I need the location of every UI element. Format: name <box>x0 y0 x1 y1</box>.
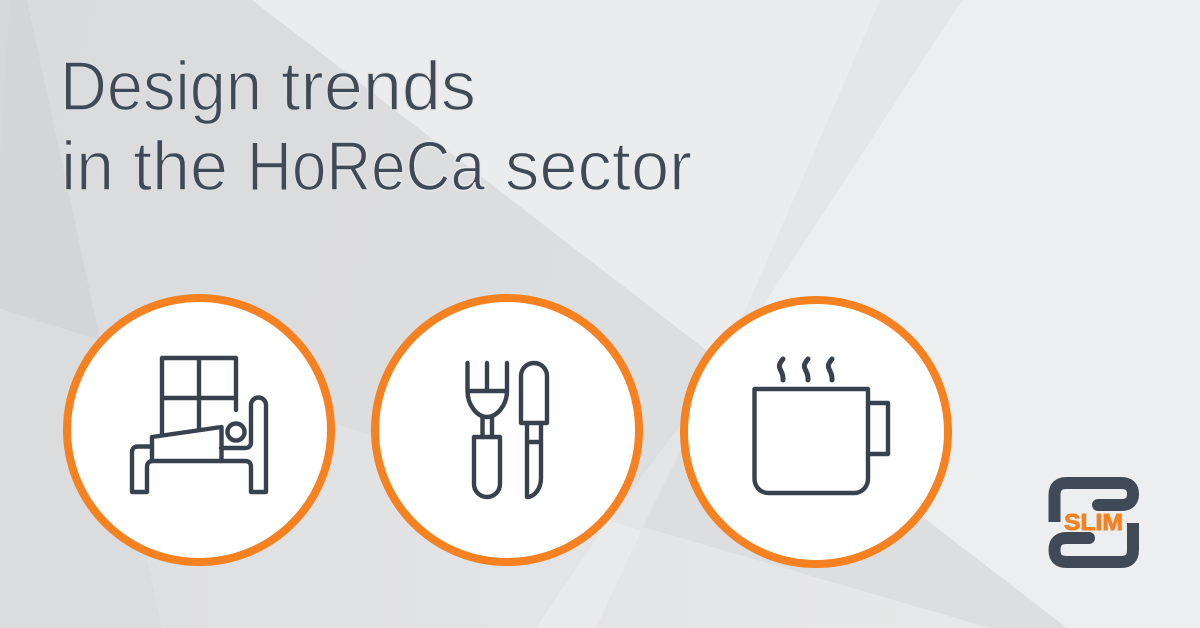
logo: SLIM: SLIM <box>1064 509 1123 535</box>
title: in the <box>61 127 228 205</box>
title: HoReCa <box>247 127 485 205</box>
title <box>60 47 692 205</box>
title: sector <box>505 127 692 205</box>
title: trends <box>281 47 476 125</box>
title: Design <box>60 47 262 125</box>
icon: fork and knife <box>468 363 547 497</box>
icon circle: hotel bed <box>67 298 331 562</box>
icon: bed by a window <box>132 358 266 492</box>
icon: steaming mug <box>754 359 888 493</box>
logo: SLIM <box>1054 483 1133 562</box>
icon circle: restaurant <box>375 298 639 562</box>
icon circle: cafe <box>684 300 948 564</box>
